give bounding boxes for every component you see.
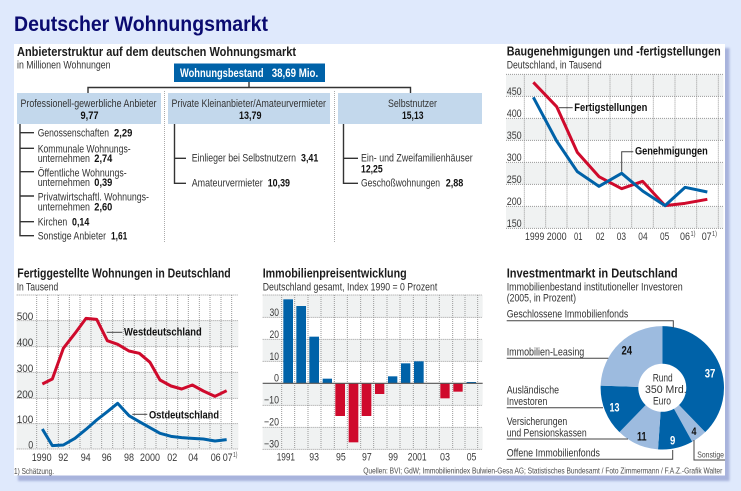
bar chart: price development: −20: [264, 416, 279, 428]
label: Offene Immobilienfonds: [507, 448, 673, 460]
line chart: West and East Germany: 96: [102, 452, 112, 464]
tree: professional providers: unternehmen: [38, 177, 90, 189]
line chart: West and East Germany: 04: [188, 452, 198, 464]
line chart: West and East Germany: 98: [124, 452, 134, 464]
line chart: permits and completions: 01: [574, 231, 582, 243]
line chart: permits and completions: 07: [702, 231, 712, 243]
line chart: West and East Germany: 200: [17, 389, 33, 401]
line chart: permits and completions: 350: [507, 130, 522, 142]
label: Ausländische Investoren: Ausländische: [507, 385, 559, 397]
line chart: West and East Germany: 2000: [140, 452, 160, 464]
subheading: Index: Deutschland gesamt, Index 1990 = 0 Prozent: [263, 282, 437, 294]
box: Professionell-gewerbliche Anbieter: [17, 93, 161, 124]
total box: Wohnungsbestand: [180, 68, 264, 80]
pie chart: investor shares: 4: [692, 426, 697, 438]
line chart: permits and completions: 03: [617, 231, 626, 243]
line chart: West and East Germany: [17, 295, 238, 464]
line chart: permits and completions: [506, 74, 723, 243]
label: Ostdeutschland: Ostdeutschland: [149, 409, 219, 421]
label: Immobilien-Leasing: Immobilien-Leasing: [507, 347, 584, 359]
line chart: permits and completions: 200: [507, 196, 522, 208]
line chart: permits and completions: 150: [507, 218, 522, 230]
label: Genehmigungen: [622, 145, 708, 172]
line chart: permits and completions: 06: [680, 231, 690, 243]
tree: professional providers: 2,60: [94, 202, 112, 214]
label: Westdeutschland: Westdeutschland: [124, 327, 202, 339]
bar chart: price development: −30: [264, 439, 279, 451]
bar chart: price development: 93: [309, 452, 319, 464]
total box: 38,69 Mio.: [272, 68, 318, 80]
box: Private Kleinanbieter: [168, 93, 330, 124]
line chart: permits and completions: 2000: [547, 231, 567, 243]
line chart: permits and completions: 02: [596, 231, 604, 243]
bar chart: price development: 10: [270, 351, 279, 363]
line chart: permits and completions: 1999: [525, 231, 544, 243]
line chart: permits and completions: 250: [507, 174, 522, 186]
panel: Immobilienpreisentwicklung: [263, 266, 483, 464]
heading: Immobilienpreisentwicklung: Immobilienpreisentwicklung: [263, 266, 407, 281]
panel: Anbieterstruktur: [17, 44, 482, 243]
tree: private providers: 10,39: [268, 178, 290, 190]
label: Geschlossene Immobilienfonds: [507, 309, 673, 328]
line chart: permits and completions: 1): [712, 231, 717, 238]
line chart: permits and completions: 300: [507, 152, 522, 164]
tree: professional providers: 1,61: [111, 230, 127, 242]
pie chart: investor shares: [601, 326, 724, 449]
tree: owner-occupiers: Geschoßwohnungen: [361, 178, 440, 190]
bar chart: price development: 30: [270, 307, 279, 319]
bar chart: price development: 1991: [277, 452, 295, 464]
label: Ausländische Investoren: [507, 385, 603, 408]
bar chart: price development: 99: [388, 452, 398, 464]
line chart: West and East Germany: 07: [223, 452, 233, 464]
heading: Anbieterstruktur: Anbieterstruktur auf dem deutschen Wohnungsmarkt: [17, 44, 297, 59]
tree: owner-occupiers: 2,88: [446, 178, 463, 190]
subheading: Immobilienbestand: (2005, in Prozent): [507, 293, 576, 305]
heading: Investmentmarkt: Investmentmarkt in Deutschland: [507, 266, 678, 281]
line chart: West and East Germany: 300: [17, 363, 33, 375]
label: Versicherungen und Pensionskassen: Versicherungen: [507, 416, 567, 428]
panel: Fertiggestellte Wohnungen: [14, 266, 238, 476]
pie chart: investor shares: 13: [610, 403, 620, 415]
line chart: West and East Germany: 1): [233, 452, 238, 459]
tree: professional providers: unternehmen: [38, 153, 90, 165]
bar chart: price development: 97: [362, 452, 372, 464]
label: Genehmigungen: Genehmigungen: [635, 145, 708, 157]
subheading: Immobilienbestand: Immobilienbestand institutioneller Investoren: [507, 282, 683, 294]
label: Sonstige: [694, 440, 725, 460]
box: Professionell-gewerbliche Anbieter: 9,77: [80, 110, 98, 122]
box: Private Kleinanbieter: 13,79: [239, 110, 262, 122]
line chart: West and East Germany: 06: [211, 452, 221, 464]
box: Selbstnutzer: Selbstnutzer: [388, 98, 437, 110]
tree: private providers: Einlieger bei Selbstnutzern: [192, 153, 296, 165]
label: Geschlossene Immobilienfonds: Geschlossene Immobilienfonds: [507, 309, 629, 321]
label: Versicherungen und Pensionskassen: [507, 416, 628, 440]
tree: owner-occupiers: Ein- und Zweifamilienhäuser: [361, 153, 473, 165]
tree: professional providers: Kommunale Wohnungs-: [38, 143, 131, 155]
bar chart: price development: [263, 295, 483, 464]
pie chart: investor shares: 24: [622, 346, 633, 358]
tree: professional providers: 2,29: [114, 128, 132, 140]
tree: professional providers: 0,39: [94, 177, 112, 189]
subheading: In Tausend: In Tausend: [17, 282, 58, 294]
bar chart: price development: 03: [440, 452, 450, 464]
bar chart: price development: −10: [264, 394, 279, 406]
label: Ausländische Investoren: Investoren: [507, 396, 547, 408]
subheading: Immobilienbestand: [507, 282, 683, 305]
line chart: West and East Germany: 500: [17, 311, 33, 323]
footnote: Schätzung: 1) Schätzung.: [14, 466, 54, 476]
tree: professional providers: 2,74: [94, 153, 113, 165]
tree: private providers: Amateurvermieter: [192, 178, 263, 190]
tree: professional providers: Sonstige Anbieter: [38, 230, 106, 242]
tree: professional providers: Privatwirtschaftl. Wohnungs-: [38, 192, 149, 204]
tree: professional providers: 0,14: [72, 216, 90, 228]
line chart: permits and completions: 400: [507, 108, 522, 120]
label: Sonstige: Sonstige: [697, 449, 724, 459]
bar chart: price development: 20: [270, 329, 279, 341]
tree: private providers: [174, 124, 318, 190]
subheading: Deutschland, in Tausend: Deutschland, in Tausend: [507, 59, 602, 71]
line chart: permits and completions: 450: [507, 86, 522, 98]
tree: professional providers: Genossenschaften: [38, 128, 109, 140]
pie chart: investor shares: Euro: [653, 396, 671, 408]
pie chart: investor shares: Rund: [653, 373, 673, 385]
panel: Investmentmarkt: [507, 266, 725, 460]
heading: Fertiggestellte Wohnungen: Fertiggestellte Wohnungen in Deutschland: [17, 266, 231, 281]
tree: owner-occupiers: 12,25: [361, 163, 383, 175]
pie chart: investor shares: 37: [705, 369, 715, 381]
title: Deutscher Wohnungsmarkt: [14, 12, 268, 36]
connector lines: [88, 82, 410, 93]
box: Selbstnutzer: 15,13: [402, 110, 424, 122]
tree: professional providers: unternehmen: [38, 202, 90, 214]
subheading: in Millionen Wohnungen: in Millionen Wohnungen: [17, 60, 110, 72]
tree: owner-occupiers: [344, 124, 473, 190]
bar chart: price development: 0: [274, 373, 279, 385]
line chart: West and East Germany: 0: [28, 439, 33, 451]
bar chart: price development: 95: [336, 452, 346, 464]
tree: private providers: 3,41: [301, 153, 318, 165]
line chart: permits and completions: 04: [638, 231, 648, 243]
box: Selbstnutzer: [338, 93, 482, 124]
bar chart: price development: 05: [467, 452, 476, 464]
line chart: permits and completions: 1): [690, 231, 696, 238]
line chart: West and East Germany: 1990: [32, 452, 52, 464]
label: Offene Immobilienfonds: Offene Immobilienfonds: [507, 448, 600, 460]
line chart: West and East Germany: 400: [17, 337, 33, 349]
tree: professional providers: Öffentliche Wohnungs-: [38, 168, 127, 180]
pie chart: investor shares: 350 Mrd.: [645, 384, 687, 396]
box: Private Kleinanbieter: Private Kleinanbieter/Amateurvermieter: [172, 98, 326, 110]
pie chart: investor shares: 9: [670, 436, 675, 448]
label: Fertigstellungen: Fertigstellungen: [574, 102, 648, 114]
tree: professional providers: Kirchen: [38, 216, 67, 228]
label: Versicherungen und Pensionskassen: und Pensionskassen: [507, 428, 587, 440]
box: Professionell-gewerbliche Anbieter: Professionell-gewerbliche Anbieter: [20, 98, 157, 110]
total box: [174, 64, 325, 82]
line chart: West and East Germany: 02: [167, 452, 177, 464]
tree: professional providers: [20, 124, 149, 242]
line chart: West and East Germany: 100: [17, 414, 33, 426]
line chart: West and East Germany: 92: [58, 452, 68, 464]
bar chart: price development: 2001: [408, 452, 427, 464]
pie chart: investor shares: 11: [637, 432, 647, 444]
line chart: permits and completions: 05: [660, 231, 669, 243]
panel: Baugenehmigungen: [506, 44, 723, 243]
line chart: West and East Germany: 94: [81, 452, 91, 464]
